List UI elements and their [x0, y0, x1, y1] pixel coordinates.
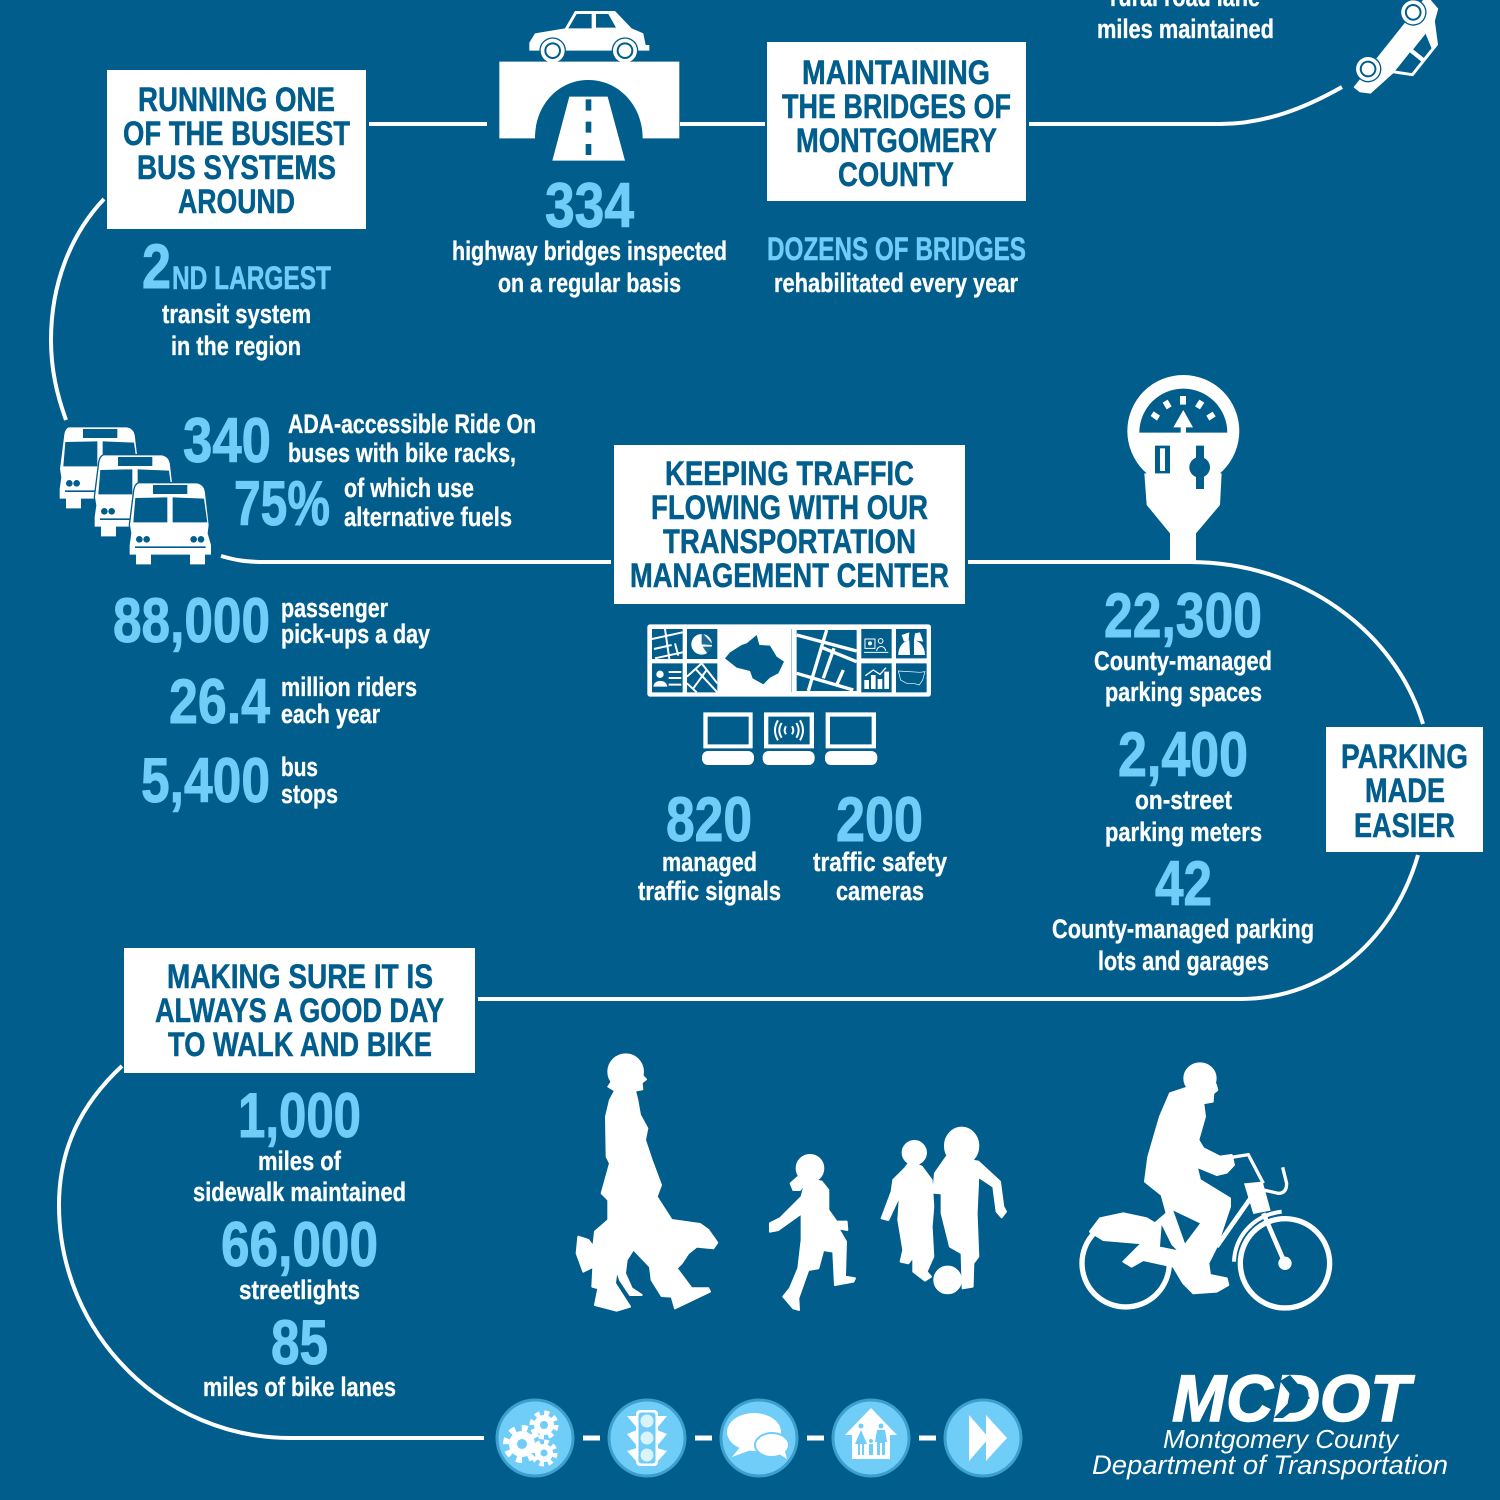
- icon: parking meter: [1127, 375, 1239, 561]
- stat: 88,000: pick-ups a day: [281, 619, 430, 649]
- stat: 334 bridges: [452, 171, 727, 298]
- stat: 2,400 meters: 2,400: [1118, 720, 1248, 790]
- icon: girl running: [770, 1155, 855, 1310]
- stat: 85 miles of bike lanes: miles of bike lanes: [203, 1372, 396, 1402]
- stat: 5,400: bus: [281, 752, 318, 782]
- logo: MCDOT: Department of Transportation: [1092, 1450, 1448, 1480]
- stat: 334 bridges: highway bridges inspected: [452, 236, 727, 266]
- icon: woman walking a dog: [577, 1054, 717, 1311]
- logo: MCDOT: [1092, 1361, 1448, 1480]
- stat: 2nd largest: [142, 232, 331, 361]
- panel: parking heading: EASIER: [1354, 807, 1455, 845]
- stat: 820 signals: [638, 785, 781, 906]
- stat: 820 signals: managed: [662, 847, 757, 877]
- panel: bridges heading: [767, 42, 1026, 201]
- stat: 2,400 meters: on-street: [1135, 785, 1232, 815]
- stat: 820 signals: traffic signals: [638, 876, 781, 906]
- icon: video wall and workstations: [647, 624, 931, 765]
- stat: 340 buses: buses with bike racks,: [288, 438, 516, 468]
- stat: 22,300 spaces: parking spaces: [1105, 677, 1262, 707]
- stat: 75 percent: of which use: [344, 473, 474, 503]
- panel: walk and bike heading: [124, 948, 475, 1073]
- logo: MCDOT: MCDOT: [1172, 1361, 1415, 1435]
- panel: walk and bike heading: MAKING SURE IT IS: [167, 958, 433, 996]
- stat: 1,000 miles of sidewalk: miles of: [258, 1146, 342, 1176]
- stat: 22,300 spaces: County-managed: [1094, 646, 1272, 676]
- stat: dozens of bridges: DOZENS OF BRIDGES: [767, 231, 1026, 267]
- stat: 200 cameras: traffic safety: [813, 847, 947, 877]
- stat: 66,000 streetlights: 66,000: [221, 1210, 378, 1280]
- panel: bridges heading: MAINTAINING: [802, 54, 990, 92]
- stat: 334 bridges: on a regular basis: [498, 268, 681, 298]
- panel: bus systems heading: BUS SYSTEMS: [137, 149, 336, 187]
- stat: 75 percent: 75%: [234, 469, 330, 539]
- stat: 5,400: 5,400: [141, 746, 270, 816]
- icon: cyclist: [1082, 1063, 1330, 1308]
- panel: traffic management heading: [614, 445, 965, 604]
- stat: 2nd largest: transit system: [162, 299, 311, 329]
- logo: MCDOT: Montgomery County: [1163, 1424, 1400, 1454]
- panel: traffic management heading: KEEPING TRAFFIC: [665, 455, 914, 493]
- stat: 820 signals: 820: [666, 785, 752, 855]
- stat: 26.4: million riders: [281, 672, 417, 702]
- panel: bus systems heading: AROUND: [178, 183, 295, 221]
- icon: fast-forward arrows: [945, 1400, 1021, 1476]
- panel: parking heading: MADE: [1365, 772, 1445, 810]
- stat: 1,000 miles of sidewalk: 1,000: [238, 1081, 361, 1151]
- stat: 340 buses: [183, 406, 536, 476]
- stat: 1,000 miles of sidewalk: sidewalk maintained: [193, 1177, 406, 1207]
- stat: dozens of bridges: [767, 231, 1026, 298]
- icon: two children with a ball: [882, 1128, 1006, 1293]
- stat: 88,000: [113, 586, 430, 656]
- icon: speech bubbles: [721, 1400, 797, 1476]
- panel: parking heading: PARKING: [1341, 738, 1468, 776]
- icon: car on bridge over road: [499, 11, 679, 161]
- panel: bridges heading: THE BRIDGES OF: [782, 88, 1011, 126]
- panel: traffic management heading: TRANSPORTATION: [663, 523, 916, 561]
- icon: upside-down car: [1343, 0, 1459, 112]
- panel: parking heading: [1326, 727, 1483, 852]
- stat: 2,400 meters: parking meters: [1105, 817, 1262, 847]
- stat: rural road lane miles: [1097, 0, 1274, 44]
- stat: 75 percent: [234, 469, 512, 539]
- stat: 340 buses: ADA-accessible Ride On: [288, 409, 536, 439]
- icon: house with family: [833, 1400, 909, 1476]
- icon: three buses: [59, 427, 212, 565]
- stat: 2,400 meters: [1105, 720, 1262, 847]
- panel: walk and bike heading: TO WALK AND BIKE: [168, 1026, 432, 1064]
- stat: 26.4: 26.4: [169, 667, 270, 737]
- stat: 5,400: stops: [281, 779, 338, 809]
- stat: 340 buses: 340: [183, 406, 271, 476]
- stat: 1,000 miles of sidewalk: [193, 1081, 406, 1207]
- stat: 26.4: [169, 667, 417, 737]
- stat: 334 bridges: 334: [545, 171, 634, 241]
- stat: 85 miles of bike lanes: [203, 1308, 396, 1402]
- panel: bus systems heading: RUNNING ONE: [138, 81, 335, 119]
- stat: 66,000 streetlights: streetlights: [239, 1275, 360, 1305]
- panel: walk and bike heading: ALWAYS A GOOD DAY: [155, 992, 444, 1030]
- panel: bridges heading: MONTGOMERY: [796, 122, 997, 160]
- stat: 42 lots: [1052, 849, 1314, 976]
- panel: bridges heading: COUNTY: [838, 156, 954, 194]
- stat: 75 percent: alternative fuels: [344, 502, 512, 532]
- panel: bus systems heading: OF THE BUSIEST: [123, 115, 350, 153]
- panel: traffic management heading: MANAGEMENT CENTER: [630, 557, 949, 595]
- stat: 85 miles of bike lanes: 85: [271, 1308, 328, 1378]
- stat: 26.4: each year: [281, 699, 380, 729]
- stat: 88,000: passenger: [281, 593, 388, 623]
- stat: 66,000 streetlights: [221, 1210, 378, 1305]
- connector dashes: [583, 1436, 936, 1440]
- stat: 42 lots: lots and garages: [1098, 946, 1269, 976]
- panel: bus systems heading: [107, 70, 366, 229]
- stat: rural road lane miles: miles maintained: [1097, 14, 1274, 44]
- stat: dozens of bridges: rehabilitated every year: [774, 268, 1018, 298]
- stat: 200 cameras: 200: [836, 785, 923, 855]
- stat: 2nd largest: ND LARGEST: [172, 260, 331, 296]
- stat: 2nd largest: 2: [142, 232, 171, 302]
- stat: 200 cameras: cameras: [836, 876, 924, 906]
- stat: 22,300 spaces: 22,300: [1104, 581, 1262, 651]
- stat: 42 lots: County-managed parking: [1052, 914, 1314, 944]
- stat: 200 cameras: [813, 785, 947, 906]
- icon strip: [497, 1400, 1021, 1476]
- icon: traffic light: [609, 1400, 685, 1476]
- stat: 88,000: 88,000: [113, 586, 270, 656]
- stat: 2nd largest: in the region: [171, 331, 301, 361]
- panel: traffic management heading: FLOWING WITH OUR: [651, 489, 928, 527]
- stat: 22,300 spaces: [1094, 581, 1272, 707]
- stat: 42 lots: 42: [1155, 849, 1212, 919]
- icon: gears: [497, 1400, 573, 1476]
